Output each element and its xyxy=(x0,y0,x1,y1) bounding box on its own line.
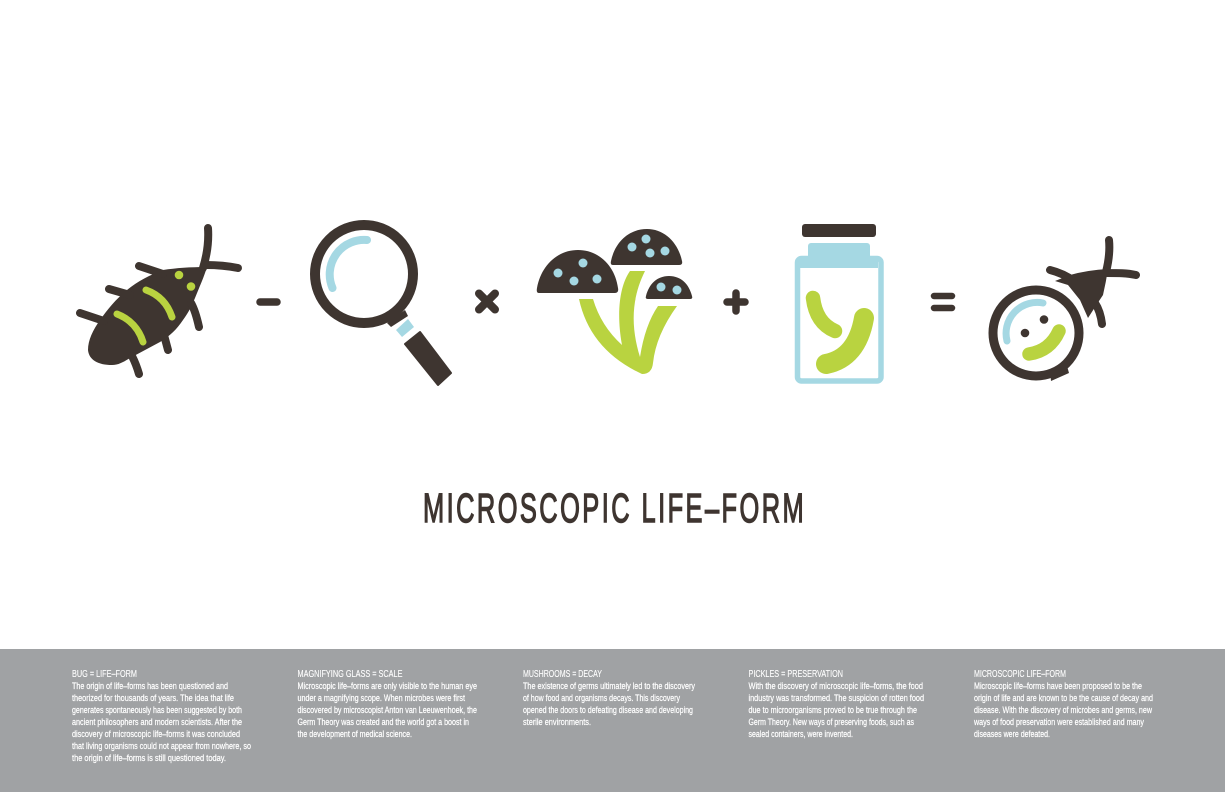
column: mushrooms xyxy=(523,669,695,727)
column: bug: theorized for thousands of years. The idea that life xyxy=(72,693,234,703)
column: pickles: Germ Theory. New ways of preserving foods, such as xyxy=(748,717,914,727)
handle xyxy=(405,332,451,385)
lens highlight xyxy=(1006,302,1043,341)
eyes xyxy=(1021,315,1048,337)
column: bug: BUG = LIFE–FORM xyxy=(72,669,137,680)
operator: equals xyxy=(934,296,952,308)
icon: microscopic life-form xyxy=(993,240,1136,381)
column: mushrooms: The existence of germs ultimately led to the discovery xyxy=(523,681,695,691)
spots xyxy=(554,234,682,294)
column: microscopic life-form: MICROSCOPIC LIFE–FORM xyxy=(974,669,1066,680)
column: pickles: PICKLES = PRESERVATION xyxy=(748,669,843,680)
column: bug: ancient philosophers and modern scientists. After the xyxy=(72,717,242,727)
lens xyxy=(993,290,1079,376)
column: microscopic life-form: ways of food preservation were established and many xyxy=(973,717,1144,727)
icon: bug xyxy=(80,228,238,374)
column: microscopic life-form: disease. With the discovery of microbes and germs, new xyxy=(974,705,1153,715)
column: pickles: With the discovery of microscopic life–forms, the food xyxy=(748,681,923,691)
legs xyxy=(80,266,199,374)
column: mushrooms: of how food and organisms decays. This discovery xyxy=(523,693,680,703)
lid xyxy=(802,224,876,237)
column: magnifying glass: Germ Theory was created and the world got a boost in xyxy=(298,717,469,727)
column: bug: generates spontaneously has been suggested by both xyxy=(72,705,242,715)
column: pickles: due to microorganisms proved to be true through the xyxy=(748,705,917,715)
top cap xyxy=(611,229,682,265)
column: mushrooms: sterile environments. xyxy=(523,717,591,727)
column: bug: discovery of microscopic life–forms it was concluded xyxy=(72,729,240,739)
lens collar xyxy=(1050,366,1069,381)
column: pickles: sealed containers, were invented. xyxy=(748,729,853,739)
operator: minus xyxy=(260,298,277,306)
pickle right xyxy=(826,318,864,364)
lens highlight xyxy=(330,240,367,288)
column: microscopic life-form: origin of life and are known to be the cause of decay and xyxy=(974,693,1153,703)
title: MICROSCOPIC LIFE–FORM xyxy=(423,486,804,532)
icon: pickle jar xyxy=(798,224,881,381)
small cap xyxy=(646,276,692,299)
column: magnifying glass xyxy=(298,669,477,739)
column: bug: the origin of life–forms is still questioned today. xyxy=(72,753,226,763)
neck xyxy=(808,243,870,259)
column: magnifying glass: MAGNIFYING GLASS = SCALE xyxy=(298,669,403,680)
column: pickles xyxy=(748,669,924,739)
bug stripes xyxy=(117,290,172,342)
column: magnifying glass: the development of medical science. xyxy=(298,729,412,739)
operator: plus xyxy=(727,293,745,311)
column: magnifying glass: under a magnifying scope. When microbes were first xyxy=(298,693,465,703)
panel: footer xyxy=(0,649,1225,792)
icon: magnifying glass xyxy=(315,225,451,385)
column: magnifying glass: Microscopic life–forms are only visible to the human eye xyxy=(298,681,477,691)
column: microscopic life-form xyxy=(973,669,1153,739)
bug head xyxy=(1055,269,1108,318)
column: mushrooms: MUSHROOMS = DECAY xyxy=(523,669,602,680)
icon: mushrooms xyxy=(537,229,692,374)
column: mushrooms: opened the doors to defeating disease and developing xyxy=(523,705,693,715)
bug eyes xyxy=(175,271,195,291)
column: magnifying glass: discovered by microscopist Anton van Leeuwenhoek, the xyxy=(298,705,477,715)
left cap xyxy=(537,250,618,293)
antenna: upper xyxy=(203,228,208,268)
column: bug: that living organisms could not appear from nowhere, so xyxy=(72,741,251,751)
pickle left xyxy=(813,298,835,331)
column: pickles: industry was transformed. The suspicion of rotten food xyxy=(748,693,924,703)
smile xyxy=(1029,331,1059,354)
bug antennae and legs xyxy=(1050,240,1136,324)
column: bug: The origin of life–forms has been questioned and xyxy=(72,681,228,691)
column: microscopic life-form: diseases were defeated. xyxy=(974,729,1050,739)
collar xyxy=(387,310,408,327)
antenna: right xyxy=(206,265,238,268)
operator: times xyxy=(479,294,495,310)
jar body xyxy=(798,258,881,381)
column: microscopic life-form: Microscopic life–forms have been proposed to be the xyxy=(974,681,1142,691)
stems xyxy=(579,271,677,374)
connector xyxy=(396,319,414,337)
column: bug xyxy=(72,669,251,763)
